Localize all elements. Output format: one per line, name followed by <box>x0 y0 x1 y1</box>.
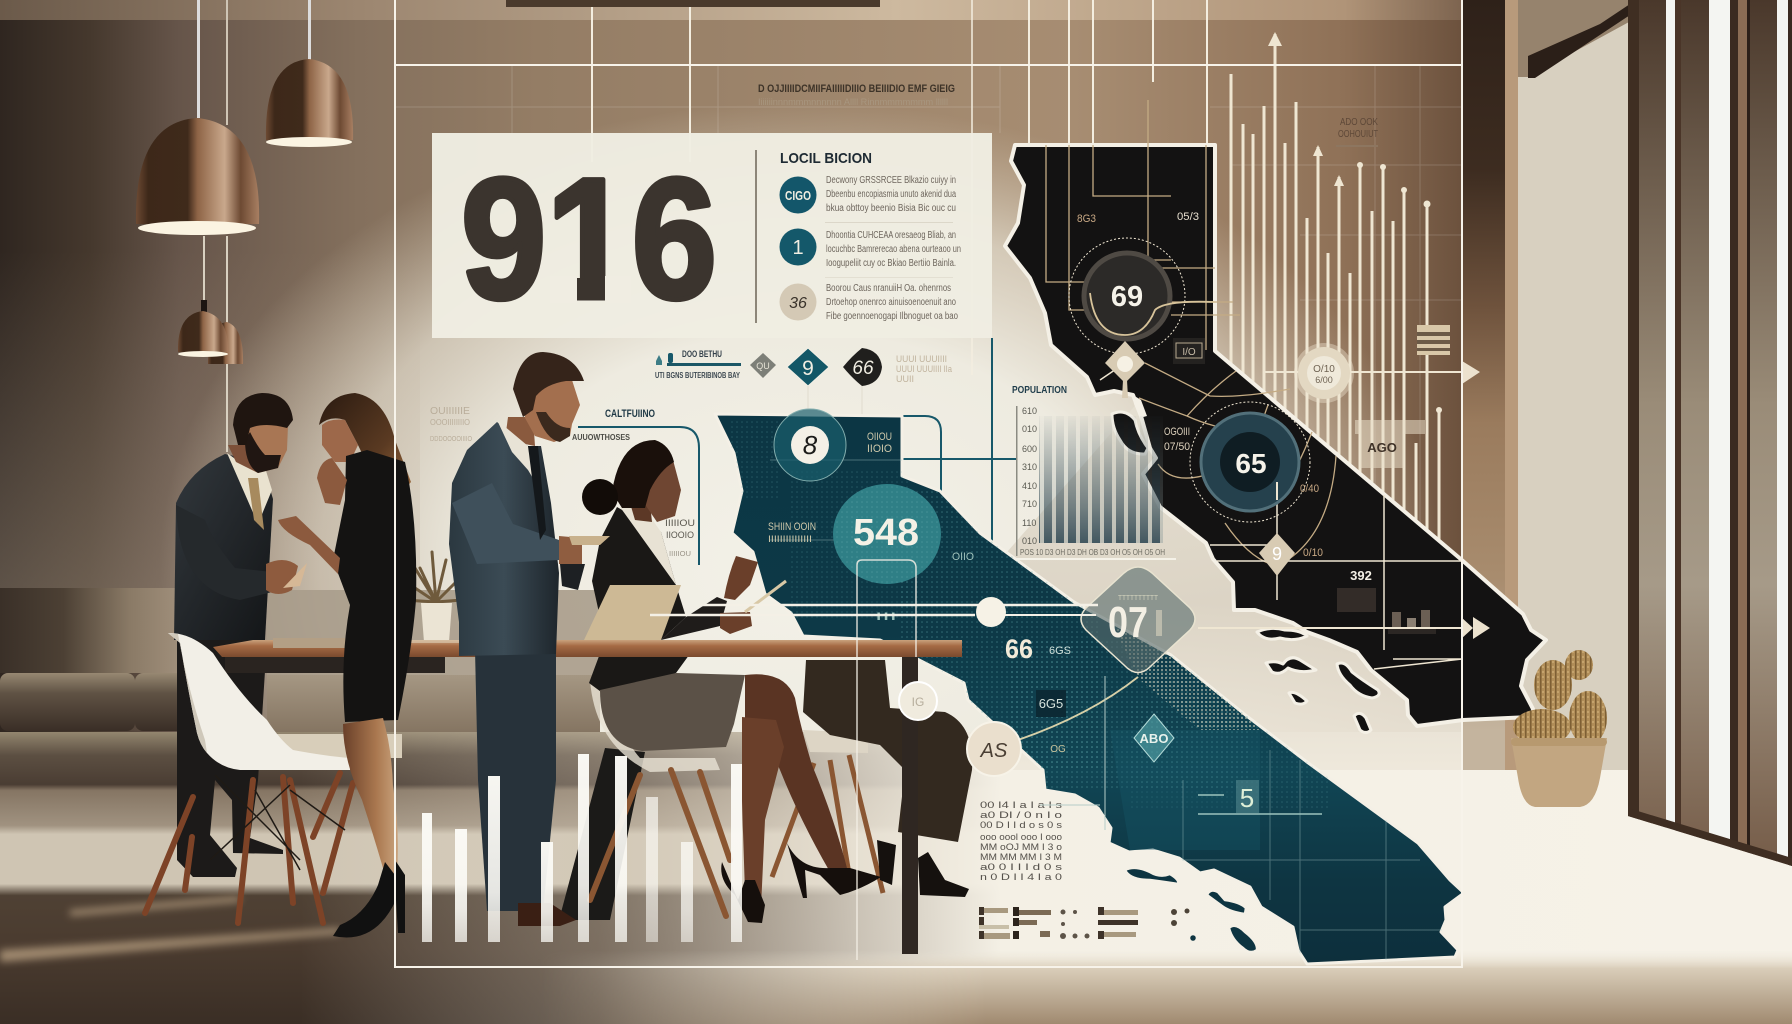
legend row: UUUI UUUIIII IIa <box>896 364 952 374</box>
floor light strips <box>0 896 340 962</box>
legend row <box>655 348 952 386</box>
item 2: Ioogupeliit cuy oc Bkiao Bertiio Bainla. <box>826 258 956 269</box>
table of small figures: a0 DI / 0 n I o <box>980 810 1062 820</box>
callout: O/10 circle: O/10 <box>1313 364 1335 375</box>
chart: population: 110 <box>1022 518 1036 528</box>
map labels: 8G3 <box>1077 213 1096 225</box>
callout: California label: CALTFUIINO <box>605 408 655 420</box>
diamond callout: 07: TTTTTTTTTT <box>1118 595 1159 602</box>
table leg <box>902 657 918 954</box>
icon: pendant lamp upper <box>266 0 353 147</box>
box on map: I/O <box>1182 347 1196 358</box>
big number 916: 916 <box>461 143 717 335</box>
table of small figures: MM oOJ MM I 3 o <box>980 842 1062 852</box>
icon: small pendant lamps <box>178 0 243 452</box>
channel islands: north <box>1257 628 1379 732</box>
chart: population: 010 <box>1022 424 1037 434</box>
teal map labels: OIIO <box>952 551 974 563</box>
map grid lines <box>1046 100 1336 566</box>
label: AGO <box>1355 420 1425 468</box>
callout: 8 <box>774 409 846 481</box>
chart: population: 710 <box>1022 499 1037 509</box>
item 3: Drtoehop onenrco ainuisoenoenuit ano <box>826 297 956 308</box>
label: 5 <box>1198 780 1322 814</box>
frame outline <box>395 0 1462 967</box>
label: dark box 608: 6G5 <box>1039 696 1063 711</box>
table leg: dark angled <box>559 748 645 920</box>
item 1 <box>780 175 956 214</box>
table <box>213 640 962 673</box>
map labels <box>1077 211 1323 559</box>
hanging lines <box>506 0 1207 375</box>
marker: 65 <box>1190 402 1310 522</box>
item 2: locuchbc Bamrerecao abena ourteaoo un <box>826 244 961 255</box>
floor <box>0 732 1792 1024</box>
chart: population: 310 <box>1022 462 1037 472</box>
bar chart: white bars <box>422 754 742 942</box>
label: 5: 5 <box>1240 783 1254 813</box>
node: large white circle <box>976 597 1006 627</box>
callout: 8: 8 <box>803 430 818 460</box>
icon: grey diamond: QU <box>756 361 770 371</box>
mini chart on map: 392 <box>1350 568 1372 583</box>
chart line tips <box>1268 32 1442 413</box>
window frames <box>1628 0 1792 900</box>
callout: O/10 circle: 6/00 <box>1315 375 1333 385</box>
marker: 69 <box>1069 238 1215 354</box>
teal map labels: OIIOU <box>867 431 892 443</box>
person: seated man behind <box>803 660 972 897</box>
person: man left <box>174 393 307 877</box>
person: woman left <box>278 393 416 938</box>
callout: California label: AUUOWTHOSES <box>572 433 631 442</box>
marker: pin upper <box>1105 341 1145 398</box>
icon: black badge 66: 66 <box>852 358 874 379</box>
diamond callout: 07: 07 <box>1108 598 1148 647</box>
table of small figures: ooo oool ooo I ooo <box>980 832 1062 842</box>
callout: California label <box>572 408 699 565</box>
chart: population: POPULATION <box>1012 385 1067 396</box>
chart lines rising <box>1231 34 1439 548</box>
label: top right: OOHOUIUT <box>1338 129 1378 140</box>
label: ABO diamond: ABO <box>1140 731 1168 746</box>
side note <box>430 406 472 443</box>
teal map labels: IIIIIIIIIIIIIII <box>768 534 812 544</box>
map labels: 0/10 <box>1303 547 1323 559</box>
item 3 <box>780 283 958 322</box>
node: IG circle <box>899 682 937 720</box>
mini bars legend <box>979 907 1190 939</box>
table of small figures: a0 0 I I I d 0 s <box>980 862 1063 872</box>
map labels: 0/40 <box>1300 483 1319 495</box>
heading: small title: Iiiiiiinnnmmmnnnnnn Allll Rinnmmmmmmm llllll <box>758 97 948 107</box>
callout: O/10 circle <box>1294 343 1354 403</box>
callout: California label: IIOOIO <box>666 530 694 540</box>
label: 66 <box>1005 634 1071 664</box>
icon: teal diamond 9 <box>787 348 829 386</box>
sofa <box>0 588 600 732</box>
label: small OG: OG <box>1050 744 1066 755</box>
teal map labels: IIOIO <box>867 443 892 455</box>
callout: 548 <box>833 484 941 584</box>
arrow: right upper <box>1265 361 1480 384</box>
item 1: Dbeenbu encopiasmia unuto akenid dua <box>826 189 956 200</box>
chair: behind man <box>772 730 883 893</box>
label: dark box 608 <box>1036 690 1066 717</box>
channel islands: south <box>1125 868 1257 952</box>
callout: California label: IIIIIOU <box>669 551 691 558</box>
map labels: 05/3 <box>1177 211 1199 223</box>
teal map labels: SHIIN OOIN <box>768 521 816 533</box>
icon: pendant lamp large <box>136 0 259 235</box>
plant: cactus <box>1511 650 1607 807</box>
item 2: Dhoontia CUHCEAA oresaeog Bliab, an <box>826 230 956 241</box>
chair: white left <box>145 633 353 923</box>
node: AS circle <box>967 722 1021 776</box>
chart: population: POS 10 D3 OH D3 DH OB D3 OH O5 OH O5 OH <box>1020 548 1165 557</box>
beam: ceiling edge <box>1528 0 1660 78</box>
heading: small title <box>758 83 955 107</box>
box on map <box>1173 338 1205 364</box>
diamond callout: 07 <box>1081 567 1195 672</box>
plant <box>404 552 462 642</box>
heading: small title: D OJJIIIIDCMIIFAIIIIIDIIIO BEIIIDIO EMF GIEIG <box>758 83 955 95</box>
side note: OOOIIIIIIIIO <box>430 418 470 427</box>
marker: 65: 65 <box>1235 448 1267 479</box>
side note: DDDOOOOIIIIO <box>430 436 472 443</box>
map: bay island <box>1112 412 1148 454</box>
label: striped box <box>1417 325 1450 355</box>
arrow: right lower <box>1198 617 1490 639</box>
label: top right <box>1336 117 1378 147</box>
map: California teal <box>715 409 1464 964</box>
label: 66: 6GS <box>1049 645 1071 657</box>
table of small figures: 00 D I I d o s 0 s <box>980 820 1063 830</box>
chart: population: 010 <box>1022 536 1037 546</box>
teal map labels <box>768 431 974 623</box>
table of small figures: 00 I4 I a I a I s <box>980 800 1063 810</box>
dotted texture <box>730 420 1445 960</box>
mini chart on map <box>1337 568 1436 634</box>
wall: right column and side wall <box>1462 0 1640 770</box>
laptop <box>584 585 681 640</box>
backdrop under black map <box>1000 351 1463 770</box>
icon: grey diamond <box>750 353 776 378</box>
marker: 69: 69 <box>1111 281 1143 313</box>
callout: California label: IIIIIOU <box>665 518 695 528</box>
item 1: CIGO <box>785 188 811 203</box>
map labels: 07/50 <box>1164 441 1190 453</box>
legend row: UUII <box>896 374 914 384</box>
item 2: 1 <box>792 237 804 259</box>
connector lines <box>808 338 1016 590</box>
table of small figures <box>980 800 1063 882</box>
legend row: UUUI UUUIIII <box>896 354 947 364</box>
icon: teal diamond 9: 9 <box>802 357 814 380</box>
map: California black <box>1005 100 1546 732</box>
panel: main stat <box>432 133 992 338</box>
side note: OUIIIIIIE <box>430 406 470 417</box>
marker: pin lower: 9 <box>1272 544 1282 564</box>
guide lines over scene <box>650 560 1138 960</box>
person: man standing <box>449 352 610 926</box>
teal map labels: III <box>875 611 897 623</box>
person: woman seated <box>582 440 881 923</box>
tablet pen <box>745 581 786 612</box>
item 3: 36 <box>789 295 807 312</box>
item 3: Boorou Caus nranuiiH Oa. ohenrnos <box>826 283 951 294</box>
label: 66: 66 <box>1005 634 1033 664</box>
legend row: UTI BGNS BUTERIBINOB BAY <box>655 371 740 380</box>
marker: pin lower <box>1259 533 1295 576</box>
chart: population: 600 <box>1022 444 1037 454</box>
table of small figures: n 0 D I I 4 I a 0 <box>980 872 1062 882</box>
item 3: Fibe goennoenogapi Ilbnoguet oa bao <box>826 311 958 322</box>
label: ABO diamond <box>1134 714 1174 762</box>
chart: population <box>1012 385 1176 560</box>
node: AS circle: AS <box>980 740 1008 762</box>
item 2 <box>780 228 961 269</box>
table papers <box>273 638 352 648</box>
label: AGO: AGO <box>1367 440 1397 455</box>
map labels: OGOIII <box>1164 426 1190 438</box>
item 1: Decwony GRSSRCEE Blkazio cuiyy in <box>826 175 956 186</box>
panel heading: LOCIL BICION <box>780 150 872 167</box>
callout: 548: 548 <box>853 512 919 554</box>
chart: population: 610 <box>1022 406 1037 416</box>
legend row: DOO BETHU <box>682 349 722 359</box>
label: top right: ADO OOK <box>1340 117 1378 128</box>
chart: population: 410 <box>1022 481 1037 491</box>
node: IG circle: IG <box>912 695 924 709</box>
frame grid lines <box>395 65 1462 560</box>
icon: black badge 66 <box>843 348 882 386</box>
table of small figures: MM MM MM I 3 M <box>980 852 1062 862</box>
item 1: bkua obttoy beenio Bisia Bic ouc cu <box>826 203 956 214</box>
